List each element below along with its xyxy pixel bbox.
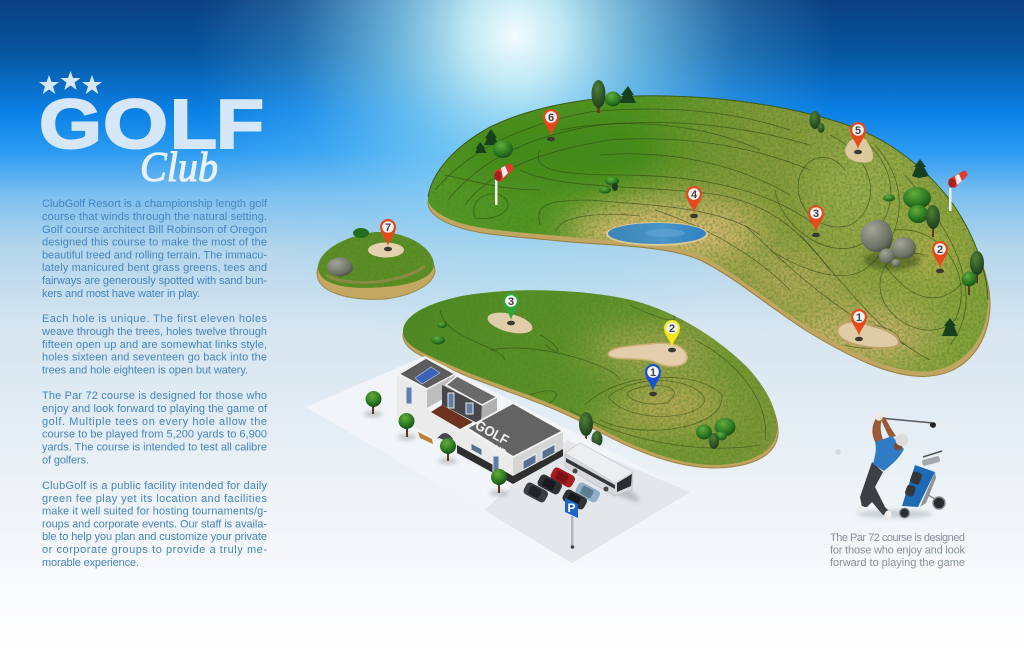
hands <box>875 413 883 421</box>
sand bunker hole 1 <box>837 322 899 348</box>
ball <box>835 449 841 455</box>
pin 2 <box>932 241 948 273</box>
bush top <box>605 92 621 106</box>
left block side <box>427 374 455 408</box>
clubhouse <box>397 358 563 484</box>
pin 6: 6 <box>548 112 554 124</box>
head <box>896 434 908 446</box>
paragraph 4 <box>42 480 268 569</box>
dark plinth <box>513 449 563 484</box>
pin 3: 3 <box>813 208 819 220</box>
front roof <box>467 403 563 457</box>
paragraph 1: course that winds through the natural setting. <box>42 211 267 223</box>
boulders <box>860 220 920 270</box>
tree 2 <box>398 413 416 440</box>
golfer <box>835 413 945 520</box>
red car <box>549 466 576 489</box>
wooden deck <box>431 405 473 429</box>
pin 5: 5 <box>855 125 861 137</box>
tall tree near hole 6 <box>592 80 606 113</box>
wordmark golf: F <box>216 85 264 163</box>
pin 7 <box>380 219 396 251</box>
paragraph 2 <box>41 313 268 376</box>
paragraph 4: roups and corporate events. Our staff is availa- <box>42 518 267 530</box>
conifer lower right <box>942 318 958 336</box>
turf <box>420 90 995 375</box>
solar panel <box>415 367 440 384</box>
roof logo: CLUB <box>482 438 508 458</box>
paragraph 3: course to be played from 5,200 yards to 6,900 <box>42 428 267 440</box>
pin 7: 7 <box>385 222 391 234</box>
front windows <box>471 443 555 472</box>
lower island, holes 1 to 3 <box>400 285 780 470</box>
paragraph 1: Golf course architect Bill Robinson of Oregon <box>42 224 267 236</box>
golfer caption: for those who enjoy and look <box>830 544 966 556</box>
rock <box>327 258 353 276</box>
conifer top <box>620 86 636 103</box>
paragraph 1: designed this course to make the most of the <box>42 236 267 248</box>
plaza trees <box>364 391 508 496</box>
hole pins <box>380 109 948 396</box>
conifer left <box>484 129 499 145</box>
dark car 1 <box>536 473 563 496</box>
golfer caption: The Par 72 course is designed <box>830 532 965 544</box>
paragraph 2: holes sixteen and seventeen go back into the <box>42 352 267 364</box>
sand bunker hole 5 <box>845 137 873 162</box>
trousers <box>860 462 890 515</box>
pin 4 <box>686 186 702 218</box>
pin 1 <box>851 309 867 341</box>
pin blue 1 <box>645 364 661 396</box>
sand bunker hole 2 on lower island <box>608 343 687 366</box>
paragraph 1: kers and most have water in play. <box>42 288 200 300</box>
stars <box>39 71 102 94</box>
contour lines <box>435 109 966 360</box>
golfer caption <box>830 532 966 569</box>
parking sign: P <box>567 501 576 515</box>
island rim <box>428 101 990 376</box>
parking sign <box>565 498 578 549</box>
wordmark club: Club <box>140 145 218 191</box>
golf club logo <box>39 71 264 191</box>
pin 2: 2 <box>937 244 943 256</box>
wordmark golf: L <box>170 85 217 163</box>
parked cars <box>522 466 601 511</box>
main golf island, holes 2 to 6 <box>420 90 995 376</box>
pin green 3: 3 <box>508 296 514 308</box>
trees on lower island <box>579 412 736 449</box>
paragraph 1: beautiful treed and rolling terrain. The immacu- <box>42 250 267 262</box>
paragraph 2: Each hole is unique. The first eleven holes <box>42 313 268 325</box>
top edge shading <box>428 96 988 300</box>
pond <box>606 222 708 246</box>
club <box>880 418 933 423</box>
tree 1 <box>364 391 382 417</box>
wordmark golf <box>39 85 264 163</box>
paragraph 3: enjoy and look forward to playing the game of <box>42 403 268 415</box>
windows upper <box>406 387 473 414</box>
tree edge upper <box>970 251 984 283</box>
golfer caption: forward to playing the game <box>830 557 965 569</box>
bush <box>353 228 369 238</box>
golf bag <box>900 451 945 518</box>
base strip <box>457 445 513 484</box>
paragraph 2: fifteen open up and are somewhat links style, <box>42 339 267 351</box>
tree right <box>926 205 940 237</box>
pin yellow 2 <box>664 320 680 352</box>
trees top right <box>810 111 824 133</box>
sand bunker hole 3 on lower island <box>486 309 534 337</box>
bench <box>418 432 433 444</box>
paragraph 4: green fee play yet its location and facilities <box>42 493 268 505</box>
pin 1: 1 <box>856 312 862 324</box>
pin yellow 2: 2 <box>669 323 675 335</box>
pin 3 <box>808 205 824 237</box>
wordmark golf: O <box>103 85 168 163</box>
windsock right <box>948 170 968 211</box>
tree 4 <box>490 469 508 496</box>
plaza pad <box>306 356 690 563</box>
small island, hole 7 <box>310 228 440 299</box>
paragraph 3: golf. Multiple tees on every hole allow the <box>42 416 267 428</box>
pin blue 1: 1 <box>650 367 656 379</box>
trees on main island <box>475 80 984 336</box>
paragraph 3 <box>42 390 268 466</box>
paragraph 4: make it well suited for hosting tournaments/g- <box>42 506 267 518</box>
tree 3 <box>439 438 457 464</box>
tour bus <box>565 443 642 506</box>
light blue car <box>574 481 601 504</box>
front block side wall <box>513 431 563 482</box>
shoes <box>856 506 892 520</box>
paragraph 3: yards. The course is intended to test all calibre <box>42 442 267 454</box>
intro text column <box>41 198 268 569</box>
dark recessed wall <box>442 385 482 425</box>
long white wall <box>397 375 513 483</box>
neck and face <box>894 442 902 450</box>
bunker <box>368 242 404 258</box>
tree edge lower <box>962 272 976 295</box>
round bush left <box>493 140 513 158</box>
dark car 3 <box>561 488 588 511</box>
roof logo <box>468 417 516 458</box>
paragraph 3: of golfers. <box>42 454 89 466</box>
paragraph 2: weave through the trees, holes twelve through <box>41 326 267 338</box>
paragraph 4: ClubGolf is a public facility intended for daily <box>42 480 268 492</box>
roof logo: GOLF <box>473 417 512 448</box>
paragraph 3: The Par 72 course is designed for those who <box>42 390 267 402</box>
windsock left <box>494 163 514 205</box>
conifer right <box>912 159 929 178</box>
bushes right <box>883 187 931 223</box>
paragraph 4: ble to help you plan and customize your private <box>42 531 267 543</box>
wordmark golf: G <box>39 85 102 163</box>
bushes centre <box>599 176 619 194</box>
bushes on lower island <box>431 322 447 344</box>
pin 6 <box>543 109 559 141</box>
shadow <box>857 510 933 518</box>
paragraph 1: fairways are generously spotted with sand bun- <box>42 275 267 287</box>
paragraph 4: morable experience. <box>42 557 139 569</box>
mid roof <box>446 376 497 405</box>
pin 4: 4 <box>691 189 698 201</box>
pin green 3 <box>503 293 519 325</box>
paragraph 2: trees and hole eighteen is open but watery. <box>42 364 248 376</box>
paragraph 1: lately manicured bent grass greens, tees and <box>42 262 267 274</box>
paragraph 1: ClubGolf Resort is a championship length golf <box>42 198 268 210</box>
pin 5 <box>850 122 866 154</box>
parking lot <box>484 440 690 563</box>
conifer far left <box>475 142 487 153</box>
mid block side <box>481 397 497 427</box>
arch door <box>437 433 453 443</box>
left roof <box>399 358 455 389</box>
paragraph 4: or corporate groups to provide a truly me- <box>42 544 267 556</box>
arms <box>872 417 896 445</box>
shirt <box>873 436 904 471</box>
paragraph 1 <box>42 198 268 300</box>
dark car 2 <box>522 481 549 504</box>
